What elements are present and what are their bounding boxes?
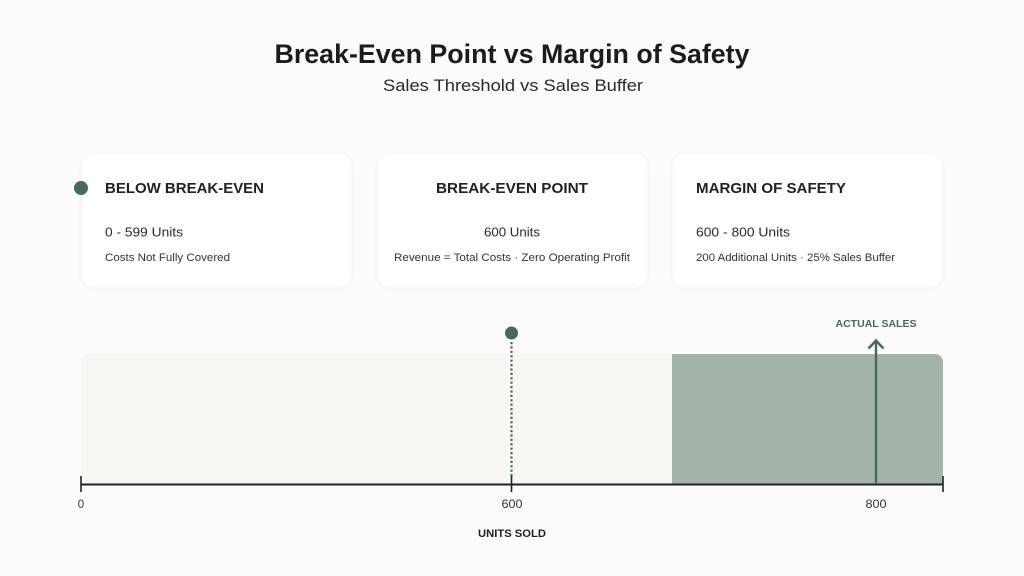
range: break-even point: 600 Units <box>484 226 540 240</box>
panel: below break-even <box>81 153 352 288</box>
heading: margin of safety: MARGIN OF SAFETY <box>696 180 846 197</box>
band: margin of safety zone <box>672 354 943 485</box>
subtitle: Sales Threshold vs Sales Buffer <box>383 76 643 95</box>
heading: below break-even: BELOW BREAK-EVEN <box>105 180 264 197</box>
description: margin of safety: 200 Additional Units · 25% Sales Buffer <box>696 252 895 264</box>
heading: break-even point: BREAK-EVEN POINT <box>436 180 588 197</box>
axis <box>81 476 943 492</box>
label: actual sales: ACTUAL SALES <box>836 318 916 330</box>
range: below break-even: 0 - 599 Units <box>105 226 183 240</box>
tick label: 800: 800 <box>866 499 886 511</box>
arrow: actual sales <box>868 340 884 484</box>
range: margin of safety: 600 - 800 Units <box>696 226 790 240</box>
icon: marker dot <box>74 181 88 195</box>
description: break-even point: Revenue = Total Costs · Zero Operating Profit <box>394 252 630 264</box>
axis title: UNITS SOLD <box>478 528 546 540</box>
tick label: 600: 600 <box>502 499 522 511</box>
description: below break-even: Costs Not Fully Covered <box>105 252 230 264</box>
chart: units sold bar <box>78 318 943 540</box>
band: below margin zone <box>81 354 672 485</box>
break-even marker <box>505 326 518 476</box>
title: Break-Even Point vs Margin of Safety <box>274 39 750 69</box>
tick label: 0: 0 <box>78 499 84 511</box>
panel: break-even point <box>377 153 648 288</box>
panel: margin of safety <box>672 153 943 288</box>
